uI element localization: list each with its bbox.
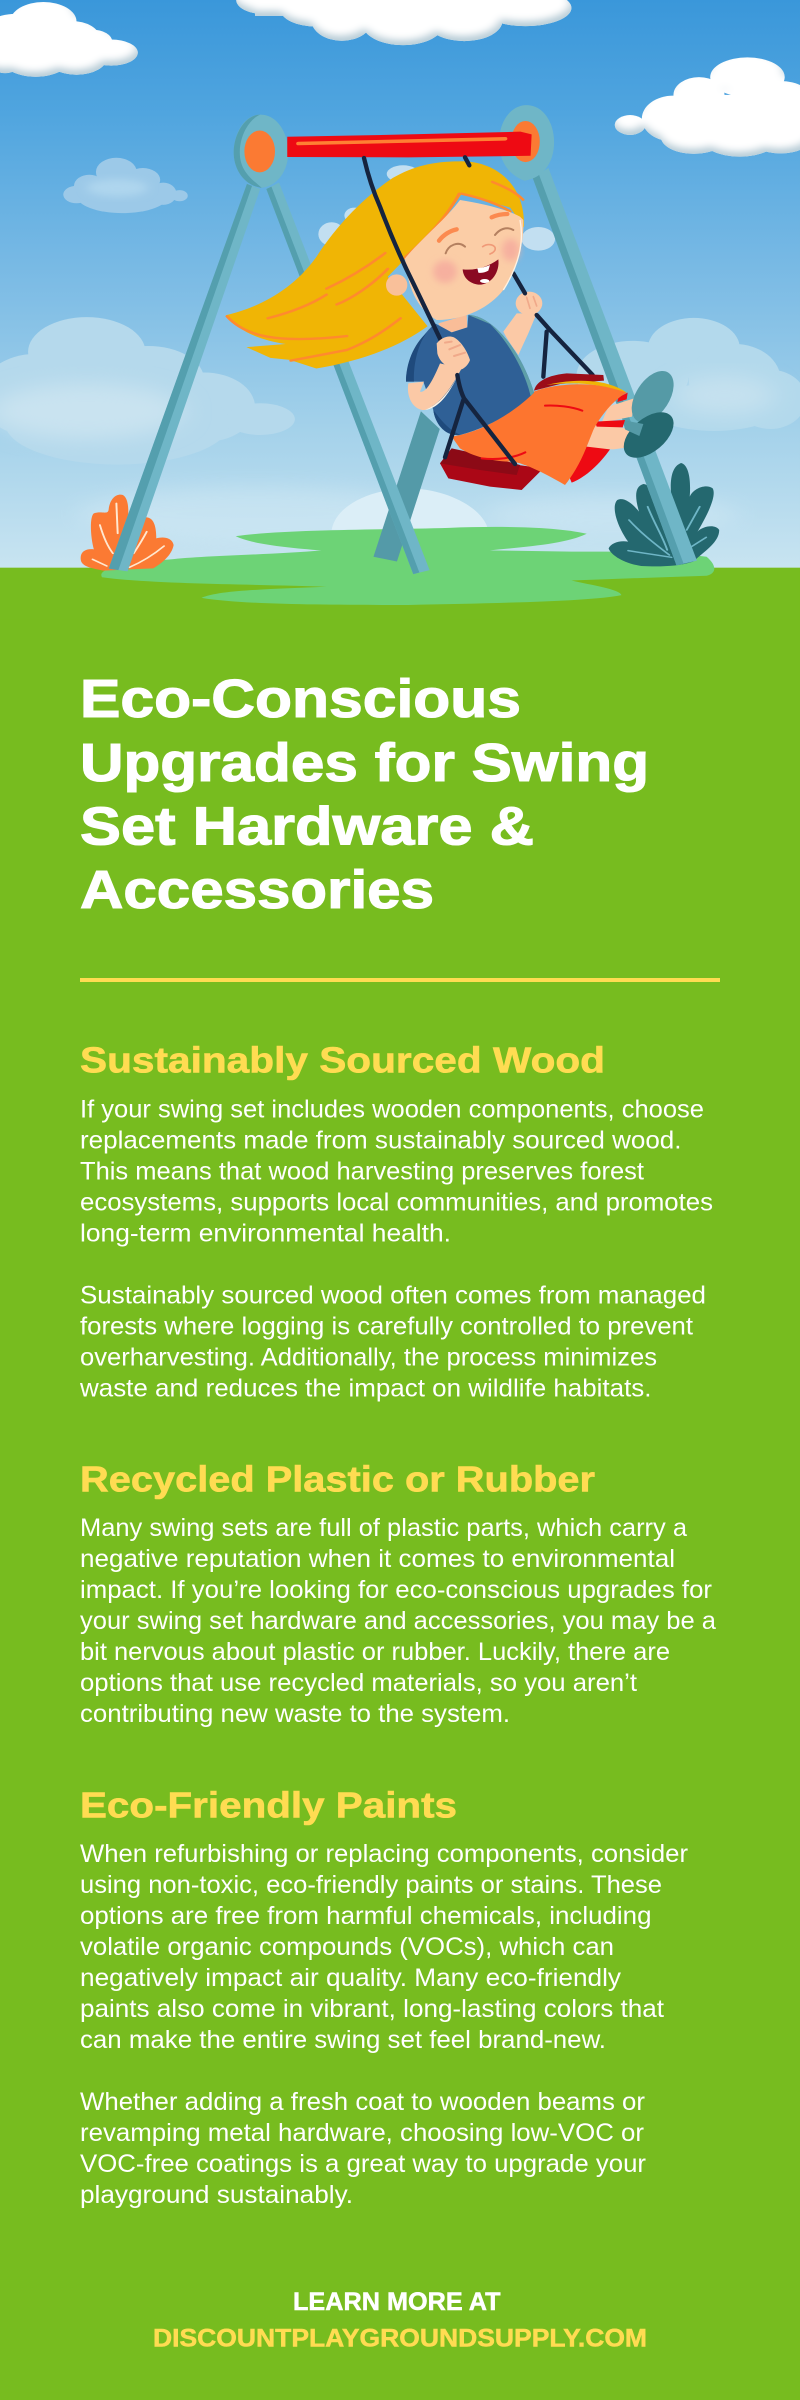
- title: Eco-Conscious: [80, 669, 521, 729]
- text: wood paragraph one: If your swing set includes wooden components, choose: [80, 1096, 704, 1124]
- section: sustainably sourced wood: [79, 1040, 713, 1402]
- section: recycled plastic or rubber: [80, 1458, 716, 1728]
- text: paints paragraph one: can make the entire swing set feel brand-new.: [80, 2026, 606, 2054]
- ear: [386, 274, 407, 296]
- seat: [440, 448, 543, 490]
- shoes: [615, 364, 682, 467]
- text: paints paragraph two: [80, 2088, 646, 2209]
- right hub: [499, 105, 554, 181]
- far rope: [465, 157, 593, 377]
- text: wood paragraph one: ecosystems, supports local communities, and promotes: [80, 1188, 713, 1216]
- heading: eco-friendly paints: Eco-Friendly Paints: [80, 1784, 457, 1826]
- back pole of swing frame: [373, 411, 440, 561]
- ground band: [0, 568, 800, 620]
- text: recycled paragraph: Many swing sets are full of plastic parts, which carry a: [80, 1514, 687, 1542]
- text: wood paragraph two: waste and reduces the impact on wildlife habitats.: [79, 1374, 652, 1402]
- front hand: [437, 336, 470, 370]
- text: recycled paragraph: contributing new waste to the system.: [80, 1700, 510, 1728]
- skirt: [452, 381, 628, 485]
- footer call to action: [153, 2288, 647, 2352]
- scenery: [0, 0, 800, 620]
- text: paints paragraph one: paints also come in vibrant, long-lasting colors that: [80, 1995, 664, 2023]
- pale cloud left: [0, 317, 295, 465]
- swing frame: [109, 105, 697, 574]
- pale cloud right: [577, 318, 800, 431]
- far hand fingers: [527, 297, 537, 308]
- text: recycled paragraph: bit nervous about plastic or rubber. Luckily, there are: [80, 1638, 670, 1666]
- main ropes: [364, 158, 515, 464]
- sky: [0, 0, 800, 568]
- text: recycled paragraph: your swing set hardware and accessories, you may be a: [80, 1607, 716, 1635]
- text: recycled paragraph: options that use recycled materials, so you aren’t: [80, 1669, 637, 1697]
- text: paints paragraph two: playground sustainably.: [80, 2181, 353, 2209]
- seat back: [534, 373, 604, 391]
- pale hill behind swing: [332, 488, 488, 530]
- text: paints paragraph two: VOC-free coatings is a great way to upgrade your: [80, 2150, 646, 2178]
- title: Accessories: [80, 860, 434, 920]
- text: paints paragraph two: revamping metal hardware, choosing low-VOC or: [80, 2119, 644, 2147]
- white cloud top left: [0, 2, 138, 77]
- website address: DISCOUNTPLAYGROUNDSUPPLY.COM: [153, 2324, 647, 2352]
- text: paints paragraph one: When refurbishing or replacing components, consider: [80, 1840, 688, 1868]
- cloud behind head: [318, 165, 555, 251]
- sky haze: [77, 486, 740, 542]
- orange bush: [81, 495, 174, 571]
- white cloud top centre: [236, 0, 571, 45]
- red top bar: [287, 132, 532, 157]
- left hub: [234, 115, 288, 188]
- heading: recycled plastic or rubber: Recycled Plastic or Rubber: [80, 1458, 595, 1500]
- divider: [80, 978, 720, 982]
- text: wood paragraph two: forests where logging is carefully controlled to prevent: [80, 1312, 693, 1340]
- legs: [587, 398, 634, 449]
- shirt: [406, 315, 534, 435]
- heading: sustainably sourced wood: Sustainably Sourced Wood: [80, 1040, 605, 1080]
- text: wood paragraph two: [79, 1282, 706, 1402]
- title: Upgrades for Swing: [80, 733, 649, 793]
- learn more label: LEARN MORE AT: [293, 2288, 500, 2316]
- text: recycled paragraph: impact. If you’re looking for eco-conscious upgrades for: [80, 1576, 712, 1604]
- text: paints paragraph one: using non-toxic, eco-friendly paints or stains. These: [80, 1871, 662, 1899]
- text: wood paragraph two: Sustainably sourced wood often comes from managed: [80, 1282, 706, 1310]
- front arm: [408, 363, 462, 410]
- text: wood paragraph one: long-term environmental health.: [80, 1220, 451, 1248]
- text: wood paragraph one: replacements made from sustainably sourced wood.: [80, 1126, 682, 1154]
- left frame pole: [109, 184, 260, 571]
- title: Set Hardware &: [80, 796, 534, 856]
- text: recycled paragraph: negative reputation when it comes to environmental: [80, 1545, 675, 1573]
- text: paints paragraph one: [80, 1840, 688, 2054]
- text: wood paragraph one: This means that wood harvesting preserves forest: [80, 1158, 644, 1186]
- teal bush: [609, 463, 719, 566]
- grass patch: [101, 527, 714, 605]
- middle frame pole: [266, 183, 430, 574]
- hair: [226, 161, 524, 369]
- face: [405, 200, 523, 320]
- text: paints paragraph one: volatile organic compounds (VOCs), which can: [80, 1933, 614, 1961]
- illustration: child on swing: [0, 0, 800, 620]
- text: wood paragraph one: [80, 1096, 713, 1248]
- small blue cloud: [63, 158, 188, 213]
- title: [80, 669, 649, 920]
- far arm and hand: [503, 292, 542, 355]
- neck: [438, 315, 467, 332]
- white cloud right: [615, 57, 800, 157]
- section: eco-friendly paints: [80, 1784, 688, 2209]
- text: paints paragraph two: Whether adding a fresh coat to wooden beams or: [80, 2088, 645, 2116]
- text: wood paragraph two: overharvesting. Additionally, the process minimizes: [80, 1344, 657, 1372]
- right frame pole: [533, 168, 697, 565]
- girl: [364, 157, 682, 490]
- text: paints paragraph one: options are free from harmful chemicals, including: [80, 1902, 652, 1930]
- text: paints paragraph one: negatively impact air quality. Many eco-friendly: [80, 1964, 622, 1992]
- text: recycled paragraph: [80, 1514, 716, 1728]
